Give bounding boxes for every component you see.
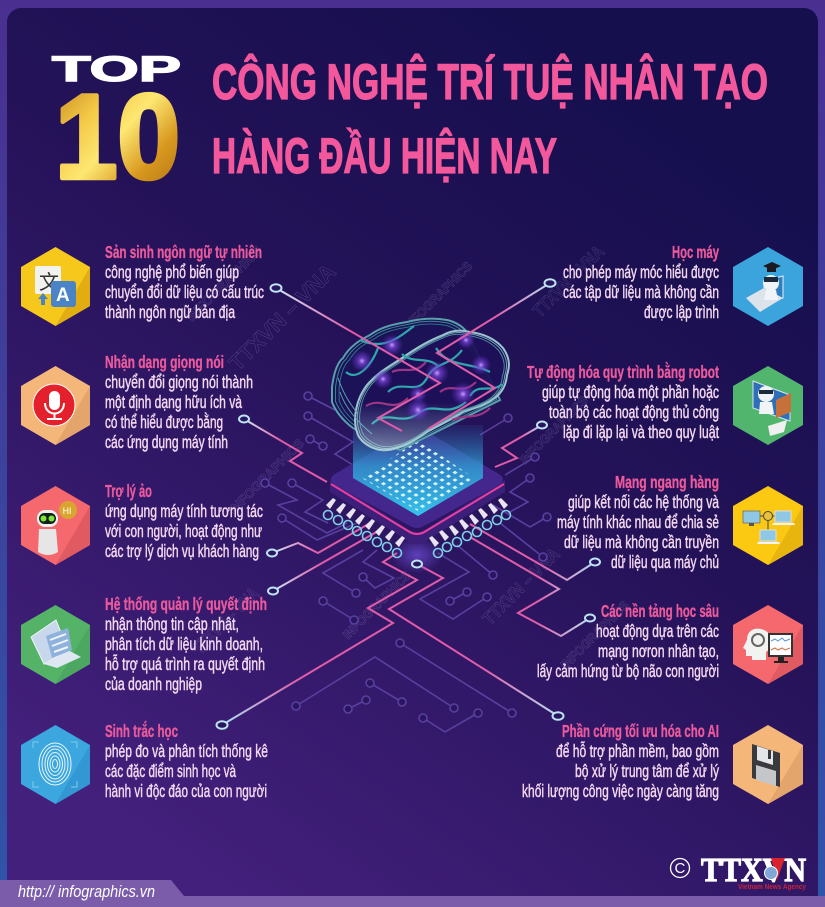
icon: microphone	[21, 366, 90, 445]
item: Sinh trắc học: phép đo và phân tích thống kê	[105, 741, 268, 761]
item: Trợ lý ảo: với con người, hoạt động như	[105, 521, 262, 541]
item: Hệ thống quản lý quyết định: Hệ thống quản lý quyết định	[105, 594, 267, 614]
item: Sản sinh ngôn ngữ tự nhiên	[21, 242, 264, 326]
wires over brain	[276, 283, 550, 431]
icon: floppy disk	[733, 725, 803, 804]
item: Phần cứng tối ưu hóa cho AI: Phần cứng tối ưu hóa cho AI	[562, 721, 719, 741]
icon: head and monitor	[733, 605, 803, 684]
connector nodes	[216, 279, 600, 729]
footer band	[0, 880, 825, 907]
item: Các nền tảng học sâu: mạng nơron nhân tạo,	[598, 641, 719, 661]
item: Sản sinh ngôn ngữ tự nhiên: công nghệ phổ biến giúp	[105, 262, 239, 282]
title	[212, 53, 768, 184]
item: Phần cứng tối ưu hóa cho AI: bộ xử lý trung tâm để xử lý	[575, 761, 719, 781]
item: Tự động hóa quy trình bằng robot: lặp đi lặp lại và theo quy luật	[563, 422, 719, 442]
icon: robot at desktop	[733, 366, 803, 445]
icon: laptop with charts	[21, 605, 90, 684]
bright circuit traces	[222, 419, 595, 725]
item: Nhận dạng giọng nói: Nhận dạng giọng nói	[105, 352, 224, 372]
item: Tự động hóa quy trình bằng robot: toàn bộ các hoạt động thủ công	[549, 402, 719, 422]
watermarks: INFOGRAPHICS	[517, 393, 591, 467]
watermarks: TTXVN – VNA	[224, 259, 341, 376]
item: Sản sinh ngôn ngữ tự nhiên: Sản sinh ngôn ngữ tự nhiên	[105, 242, 262, 262]
item: Phần cứng tối ưu hóa cho AI: khối lượng công việc ngày càng tăng	[522, 781, 719, 801]
item: Nhận dạng giọng nói: chuyển đổi giọng nói thành	[105, 372, 253, 392]
title: HÀNG ĐẦU HIỆN NAY	[212, 128, 557, 184]
item: Sản sinh ngôn ngữ tự nhiên: chuyển đổi dữ liệu có cấu trúc	[105, 282, 264, 302]
item: Học máy	[563, 242, 803, 326]
item: Mạng ngang hàng: giúp kết nối các hệ thống và	[568, 492, 719, 512]
item: Nhận dạng giọng nói	[21, 352, 253, 452]
brain glow nodes	[351, 331, 491, 422]
item: Trợ lý ảo: các trợ lý dịch vụ khách hàng	[105, 541, 259, 561]
chip pins	[324, 498, 510, 558]
item: Các nền tảng học sâu: hoạt động dựa trên các	[596, 621, 719, 641]
item: Mạng ngang hàng: Mạng ngang hàng	[615, 472, 719, 492]
item: Trợ lý ảo: ứng dụng máy tính tương tác	[105, 501, 263, 521]
logo: TTXVN: TTXVN	[701, 852, 806, 889]
brain lower wash	[355, 331, 509, 450]
item: Sản sinh ngôn ngữ tự nhiên: thành ngôn ngữ bản địa	[105, 302, 235, 322]
icon: translate	[21, 247, 90, 326]
item: Nhận dạng giọng nói: có thể hiểu được bằng	[105, 411, 223, 432]
watermarks: TTXVN – VNA	[189, 584, 263, 658]
badge: TOP 10: TOP	[52, 50, 181, 89]
item: Học máy: các tập dữ liệu mà không cần	[563, 282, 719, 302]
watermarks: INFOGRAPHICS	[340, 568, 414, 642]
icon: peer network	[733, 486, 803, 565]
icon: translate: 文	[39, 266, 59, 295]
item: Trợ lý ảo: Trợ lý ảo	[105, 481, 152, 501]
item: Học máy: cho phép máy móc hiểu được	[563, 262, 719, 282]
chip body	[330, 428, 505, 544]
item: Học máy: Học máy	[672, 242, 719, 262]
watermarks: TTXVN – VNA	[529, 242, 608, 321]
watermarks: INFOGRAPHICS	[558, 598, 632, 672]
brain and chip	[276, 283, 550, 558]
item: Tự động hóa quy trình bằng robot: giúp tự động hóa một phần hoặc	[542, 382, 719, 402]
LED dots	[362, 440, 474, 511]
item: Các nền tảng học sâu: lấy cảm hứng từ bộ não con người	[537, 661, 719, 681]
watermarks: INFOGRAPHICS	[184, 243, 265, 324]
item: Sinh trắc học: Sinh trắc học	[105, 720, 178, 741]
watermarks: INFOGRAPHICS	[226, 436, 307, 517]
item: Sinh trắc học: các đặc điểm sinh học và	[105, 761, 236, 781]
item: Tự động hóa quy trình bằng robot: Tự động hóa quy trình bằng robot	[527, 361, 719, 382]
item: Hệ thống quản lý quyết định: phân tích dữ liệu kinh doanh,	[105, 634, 263, 654]
item: Hệ thống quản lý quyết định	[21, 594, 267, 694]
item: Sinh trắc học: hành vi độc đáo của con người	[105, 781, 267, 801]
light beam	[353, 425, 483, 516]
item: Sinh trắc học	[21, 720, 268, 804]
watermarks: INFOGRAPHICS	[400, 258, 475, 334]
icon: translate: A	[56, 285, 70, 306]
icon: fingerprint	[21, 725, 90, 804]
icon: robot assistant	[21, 486, 90, 565]
item: Mạng ngang hàng: máy tính khác nhau để chia sẻ	[557, 512, 719, 532]
item: Phần cứng tối ưu hóa cho AI: để hỗ trợ phần mềm, bao gồm	[556, 740, 719, 761]
badge: TOP 10: 10	[55, 70, 180, 204]
item: Nhận dạng giọng nói: các ứng dụng máy tính	[105, 432, 228, 452]
item: Hệ thống quản lý quyết định: của doanh nghiệp	[105, 674, 202, 694]
item: Mạng ngang hàng: dữ liệu mà không cần truyền	[564, 532, 719, 552]
item: Phần cứng tối ưu hóa cho AI	[522, 721, 803, 804]
item: Mạng ngang hàng	[557, 472, 803, 572]
faint circuit traces	[261, 392, 551, 732]
item: Hệ thống quản lý quyết định: nhận thông tin cập nhật,	[105, 614, 239, 634]
item: Hệ thống quản lý quyết định: hỗ trợ quá trình ra quyết định	[105, 653, 265, 674]
watermarks: TTXVN – VNA	[479, 544, 564, 629]
icon: robot assistant: HI	[62, 506, 72, 516]
item: Mạng ngang hàng: dữ liệu qua máy chủ	[611, 552, 719, 572]
item: Tự động hóa quy trình bằng robot	[527, 361, 803, 445]
item: Học máy: được lập trình	[644, 302, 719, 322]
footer url: http:// infographics.vn	[18, 882, 155, 901]
item: Các nền tảng học sâu	[537, 601, 803, 684]
watermarks	[184, 242, 632, 672]
logo: TTXVN: C	[674, 860, 686, 877]
brain back lobe	[332, 319, 500, 450]
logo: TTXVN: Vietnam News Agency	[738, 882, 807, 891]
item: Trợ lý ảo	[21, 481, 263, 565]
item: Các nền tảng học sâu: Các nền tảng học sâu	[601, 601, 719, 621]
brain folds	[338, 326, 502, 434]
logo: TTXVN	[670, 852, 807, 891]
icon: robot on laptop	[733, 247, 803, 326]
item: Nhận dạng giọng nói: một định dạng hữu ích và	[105, 392, 242, 412]
brain front lobe	[355, 331, 509, 450]
